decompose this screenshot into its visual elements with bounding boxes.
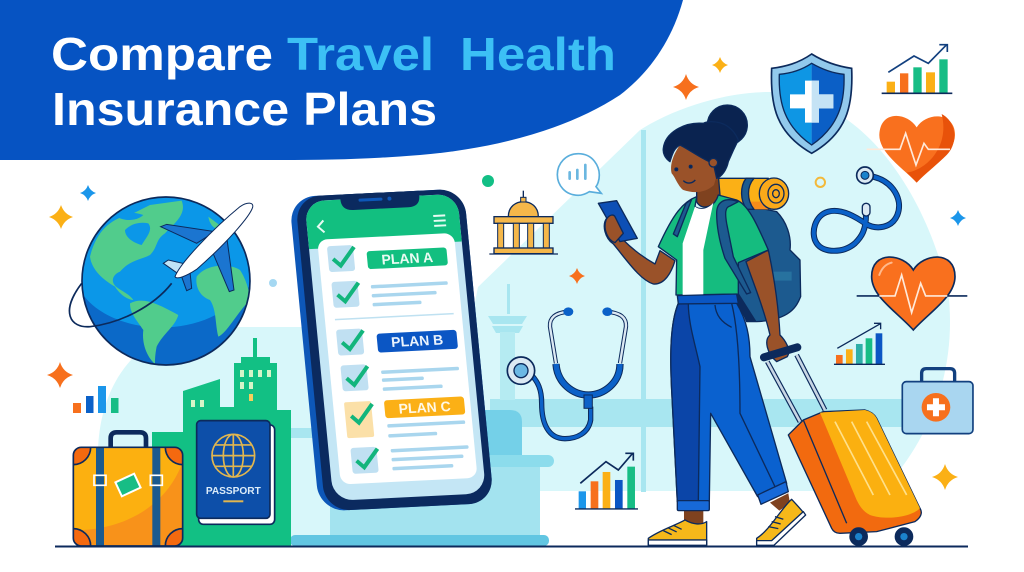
bedroll xyxy=(717,178,789,209)
smartphone with plan checklist xyxy=(289,188,494,512)
background: light airport scene xyxy=(98,92,950,546)
small growth chart, right xyxy=(834,323,885,364)
title: Insurance Plans xyxy=(52,83,437,135)
trousers xyxy=(671,294,787,502)
ground line xyxy=(55,546,968,548)
city skyline xyxy=(152,338,291,546)
bar chart, centre bottom xyxy=(575,453,638,509)
held phone xyxy=(598,201,637,242)
bar chart, top right xyxy=(882,45,952,93)
head xyxy=(663,105,747,192)
icon: first aid kit xyxy=(902,369,973,434)
icon: heart with pulse, lower xyxy=(857,257,967,330)
header banner xyxy=(0,0,683,160)
shoes xyxy=(648,499,806,545)
notch xyxy=(340,191,420,211)
plane xyxy=(161,203,253,292)
mini bar chart, left xyxy=(73,386,118,413)
backpack xyxy=(737,203,801,322)
stethoscope, centre xyxy=(507,307,626,439)
white panel xyxy=(317,233,478,485)
title: Travel xyxy=(287,28,434,80)
straps xyxy=(717,200,751,294)
traveller woman with backpack xyxy=(598,105,806,545)
icon: chat bubble xyxy=(557,154,601,195)
icon: shield with medical cross xyxy=(771,54,852,153)
rolling orange suitcase xyxy=(764,347,921,545)
passport: PASSPORT xyxy=(206,486,261,497)
plan C row: PLAN C xyxy=(398,398,451,417)
title xyxy=(51,28,616,135)
shirt xyxy=(658,195,768,295)
icon: museum building xyxy=(489,191,558,254)
title: Compare xyxy=(51,28,273,80)
left arm and hand xyxy=(604,215,675,284)
right arm xyxy=(746,250,789,362)
decorative sparkle stars xyxy=(47,57,966,490)
title: Health xyxy=(460,28,616,80)
plan C row xyxy=(344,396,467,440)
plan B row xyxy=(336,324,462,393)
plan A row: PLAN A xyxy=(381,249,434,268)
icon: heart with pulse, upper xyxy=(867,114,955,183)
cuffs and ankles xyxy=(677,482,790,524)
orbit path xyxy=(69,283,172,327)
suitcase xyxy=(72,430,184,546)
final row xyxy=(350,442,471,474)
passport xyxy=(197,421,275,524)
plan B row: PLAN B xyxy=(390,331,444,350)
plan A row xyxy=(327,240,452,308)
stethoscope, right xyxy=(814,167,899,251)
neck xyxy=(697,175,720,207)
globe with plane xyxy=(69,197,253,370)
